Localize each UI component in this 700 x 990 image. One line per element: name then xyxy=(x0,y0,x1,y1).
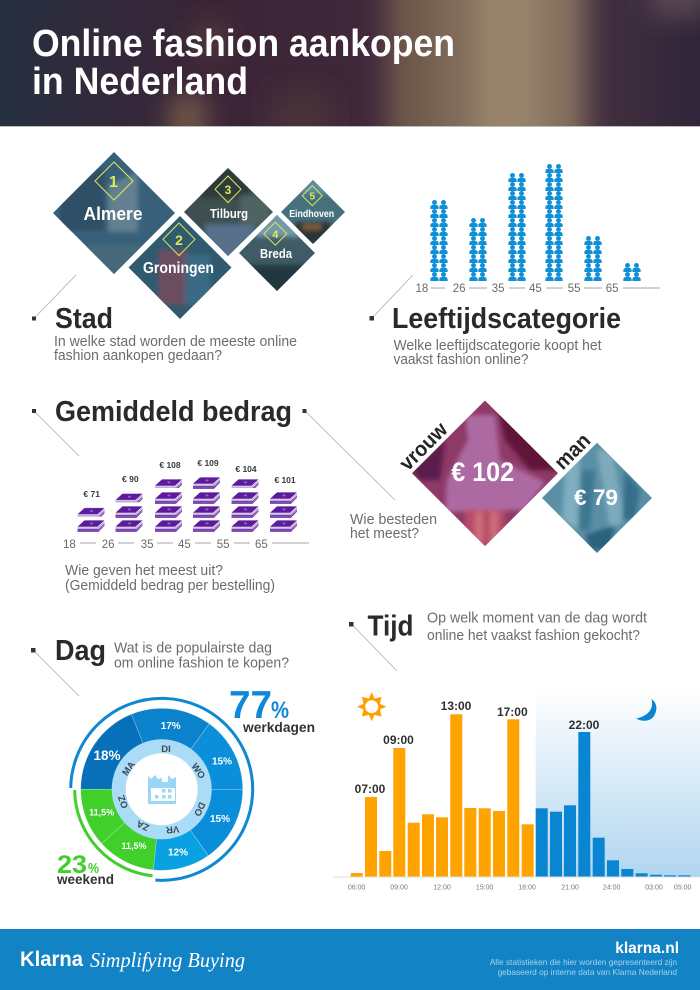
peak labels: 07:00 xyxy=(355,782,386,796)
age axis: 35 xyxy=(141,539,153,551)
percentage labels xyxy=(89,721,232,858)
icon: calendar xyxy=(148,775,176,804)
city diamond: Tilburg: Tilburg xyxy=(210,206,248,221)
amount labels: € 108 xyxy=(159,460,181,470)
text: wie besteden het meest xyxy=(350,511,437,542)
diamond: man: € 79 xyxy=(574,485,618,510)
heading: dag: Dag xyxy=(55,635,106,667)
time axis xyxy=(333,877,700,892)
text: source note: Alle statistieken die hier worden gepresenteerd zijn xyxy=(490,957,677,967)
percentage labels: 12% xyxy=(168,848,188,858)
amount labels: € 109 xyxy=(197,458,219,468)
text: bedrag question xyxy=(65,562,275,594)
city diamond: Eindhoven: 5 xyxy=(310,192,316,202)
text: tijd question: Op welk moment van de dag wordt xyxy=(427,610,648,626)
percentage labels: 15% xyxy=(212,756,232,768)
text: stad question: In welke stad worden de meeste online xyxy=(54,333,297,350)
time axis: 05:00 xyxy=(674,884,692,892)
age axis: 65 xyxy=(255,539,268,551)
day labels: VR xyxy=(165,823,180,835)
city diamond: Breda xyxy=(237,213,317,293)
stat: 77% werkdagen xyxy=(229,684,315,735)
percentage labels: 18% xyxy=(93,748,121,763)
header banner xyxy=(0,0,700,127)
amount labels xyxy=(83,458,296,499)
percentage labels: 17% xyxy=(161,721,181,732)
daytime bars xyxy=(351,714,534,877)
age axis xyxy=(63,539,309,551)
outer arc: werkdagen xyxy=(71,698,253,880)
age axis: 45 xyxy=(529,283,542,295)
stat: 77% werkdagen: % xyxy=(271,697,289,724)
amount labels: € 71 xyxy=(83,489,100,499)
heading: gemiddeld bedrag: Gemiddeld bedrag xyxy=(55,396,292,428)
time axis: 09:00 xyxy=(390,884,408,892)
city diamond: Almere xyxy=(50,150,180,276)
text: leeftijd question xyxy=(394,337,602,368)
text: stad question xyxy=(54,333,297,364)
age axis: 45 xyxy=(178,539,191,551)
panel: gemiddeld bedrag xyxy=(32,396,309,594)
city diamond: Almere: 1 xyxy=(109,174,118,191)
age axis xyxy=(416,283,660,295)
text: dag question xyxy=(114,640,289,672)
pointer: wie besteden xyxy=(302,409,395,500)
text: dag question: om online fashion te kopen? xyxy=(114,654,289,672)
age axis: 35 xyxy=(492,283,504,295)
city diamond: Eindhoven xyxy=(281,180,345,244)
peak labels: 17:00 xyxy=(497,705,528,719)
heading: stad: Stad xyxy=(55,303,113,335)
day labels: WO xyxy=(189,761,207,781)
age axis: 26 xyxy=(453,283,465,295)
time axis: 21:00 xyxy=(561,884,579,892)
percentage labels: 15% xyxy=(210,814,230,825)
title: Online fashion aankopen xyxy=(32,23,455,65)
city diamond: Groningen xyxy=(128,216,232,319)
pointer: stad xyxy=(32,275,76,320)
city diamond: Tilburg: 3 xyxy=(225,183,232,197)
panel: vrouw en man xyxy=(302,398,655,555)
age axis: 18 xyxy=(63,539,76,551)
pointer: leeftijd xyxy=(370,275,413,320)
night background xyxy=(536,688,700,877)
day labels: DO xyxy=(191,800,207,818)
stat: 23% weekend xyxy=(56,851,114,887)
age axis: 18 xyxy=(416,283,428,295)
age axis: 26 xyxy=(102,539,114,551)
day labels: OZ xyxy=(116,793,131,810)
text: leeftijd question: Welke leeftijdscategorie koopt het xyxy=(394,337,602,354)
time axis: 03:00 xyxy=(645,884,663,892)
city diamond: Groningen: 2 xyxy=(175,232,183,248)
panel: stad xyxy=(32,150,347,364)
amount labels: € 104 xyxy=(235,464,257,474)
pictogram chart: shoppers per age group xyxy=(430,164,641,281)
text: bedrag question: Wie geven het meest uit? xyxy=(65,562,223,579)
text: wie besteden het meest: Wie besteden xyxy=(350,511,437,528)
pointer: tijd xyxy=(349,622,397,671)
day labels: MA xyxy=(120,760,138,778)
day labels: ZA xyxy=(135,817,151,833)
peak labels: 22:00 xyxy=(569,718,600,732)
stat: 23% weekend: % xyxy=(88,860,99,877)
city diamond: Groningen: Groningen xyxy=(143,260,214,277)
text: leeftijd question: vaakst fashion online? xyxy=(394,351,528,368)
text: wie besteden het meest: het meest? xyxy=(350,525,419,542)
peak labels xyxy=(355,699,600,796)
logo: Klarna: Klarna xyxy=(20,948,83,971)
text: source note: gebaseerd op interne data van Klarna Nederland xyxy=(498,967,677,977)
heading: leeftijdscategorie: Leeftijdscategorie xyxy=(392,303,621,335)
title: in Nederland xyxy=(32,61,248,103)
amount labels: € 90 xyxy=(122,474,139,484)
text: stad question: fashion aankopen gedaan? xyxy=(54,347,222,364)
slogan: Simplifying Buying xyxy=(90,948,245,972)
weekday segments xyxy=(81,708,243,870)
time axis: 18:00 xyxy=(518,884,536,892)
stat: 23% weekend: 23 xyxy=(57,851,87,879)
donut chart: share per weekday xyxy=(71,698,253,880)
icon: moon xyxy=(636,699,656,721)
footer band xyxy=(0,929,700,990)
time axis: 24:00 xyxy=(603,884,621,892)
label: man: man xyxy=(550,429,595,474)
amount labels: € 101 xyxy=(274,475,296,485)
time axis: 06:00 xyxy=(348,884,366,892)
bar chart: purchases per hour xyxy=(333,699,700,892)
city diamond: Almere: Almere xyxy=(84,204,142,224)
panel: leeftijdscategorie xyxy=(370,164,660,368)
text: tijd question xyxy=(427,610,648,644)
text: dag question: Wat is de populairste dag xyxy=(114,640,272,656)
city diamond: Eindhoven: Eindhoven xyxy=(289,209,334,220)
text: bedrag question: (Gemiddeld bedrag per bestelling) xyxy=(65,577,275,594)
age axis: 55 xyxy=(568,283,580,295)
stat: 77% werkdagen: 77 xyxy=(229,684,272,727)
city diamond: Breda: Breda xyxy=(260,247,293,261)
text: tijd question: online het vaakst fashion gekocht? xyxy=(427,627,640,644)
stat: 23% weekend: weekend xyxy=(56,872,114,887)
city diamond: Tilburg xyxy=(182,166,275,258)
pictogram chart: money stacks per age group xyxy=(76,475,298,532)
stat: 77% werkdagen: werkdagen xyxy=(242,719,315,735)
site name: klarna.nl xyxy=(615,940,679,957)
peak labels: 13:00 xyxy=(441,699,472,713)
percentage labels: 11,5% xyxy=(121,841,147,851)
peak labels: 09:00 xyxy=(383,733,414,747)
outer arc: weekend xyxy=(75,790,153,876)
age axis: 55 xyxy=(217,539,229,551)
percentage labels: 11,5% xyxy=(89,808,114,818)
day labels xyxy=(116,744,207,835)
city diamond: Breda: 4 xyxy=(272,229,279,241)
panel: dag xyxy=(31,635,315,887)
time axis: 15:00 xyxy=(476,884,494,892)
pointer: dag xyxy=(31,648,79,696)
inner day ring xyxy=(112,739,212,839)
diamond: man xyxy=(540,440,655,555)
pointer: gemiddeld bedrag xyxy=(32,409,79,456)
heading: tijd: Tijd xyxy=(368,610,414,642)
evening bars xyxy=(536,732,690,877)
diamond: vrouw: € 102 xyxy=(451,457,514,487)
age axis: 65 xyxy=(606,283,618,295)
text: source note xyxy=(490,957,677,977)
panel: tijd xyxy=(333,610,700,892)
icon: sun xyxy=(357,692,386,721)
diamond: vrouw xyxy=(410,398,560,548)
title xyxy=(32,23,455,103)
time axis: 12:00 xyxy=(433,884,451,892)
day labels: DI xyxy=(161,744,171,755)
label: vrouw: vrouw xyxy=(395,418,453,475)
